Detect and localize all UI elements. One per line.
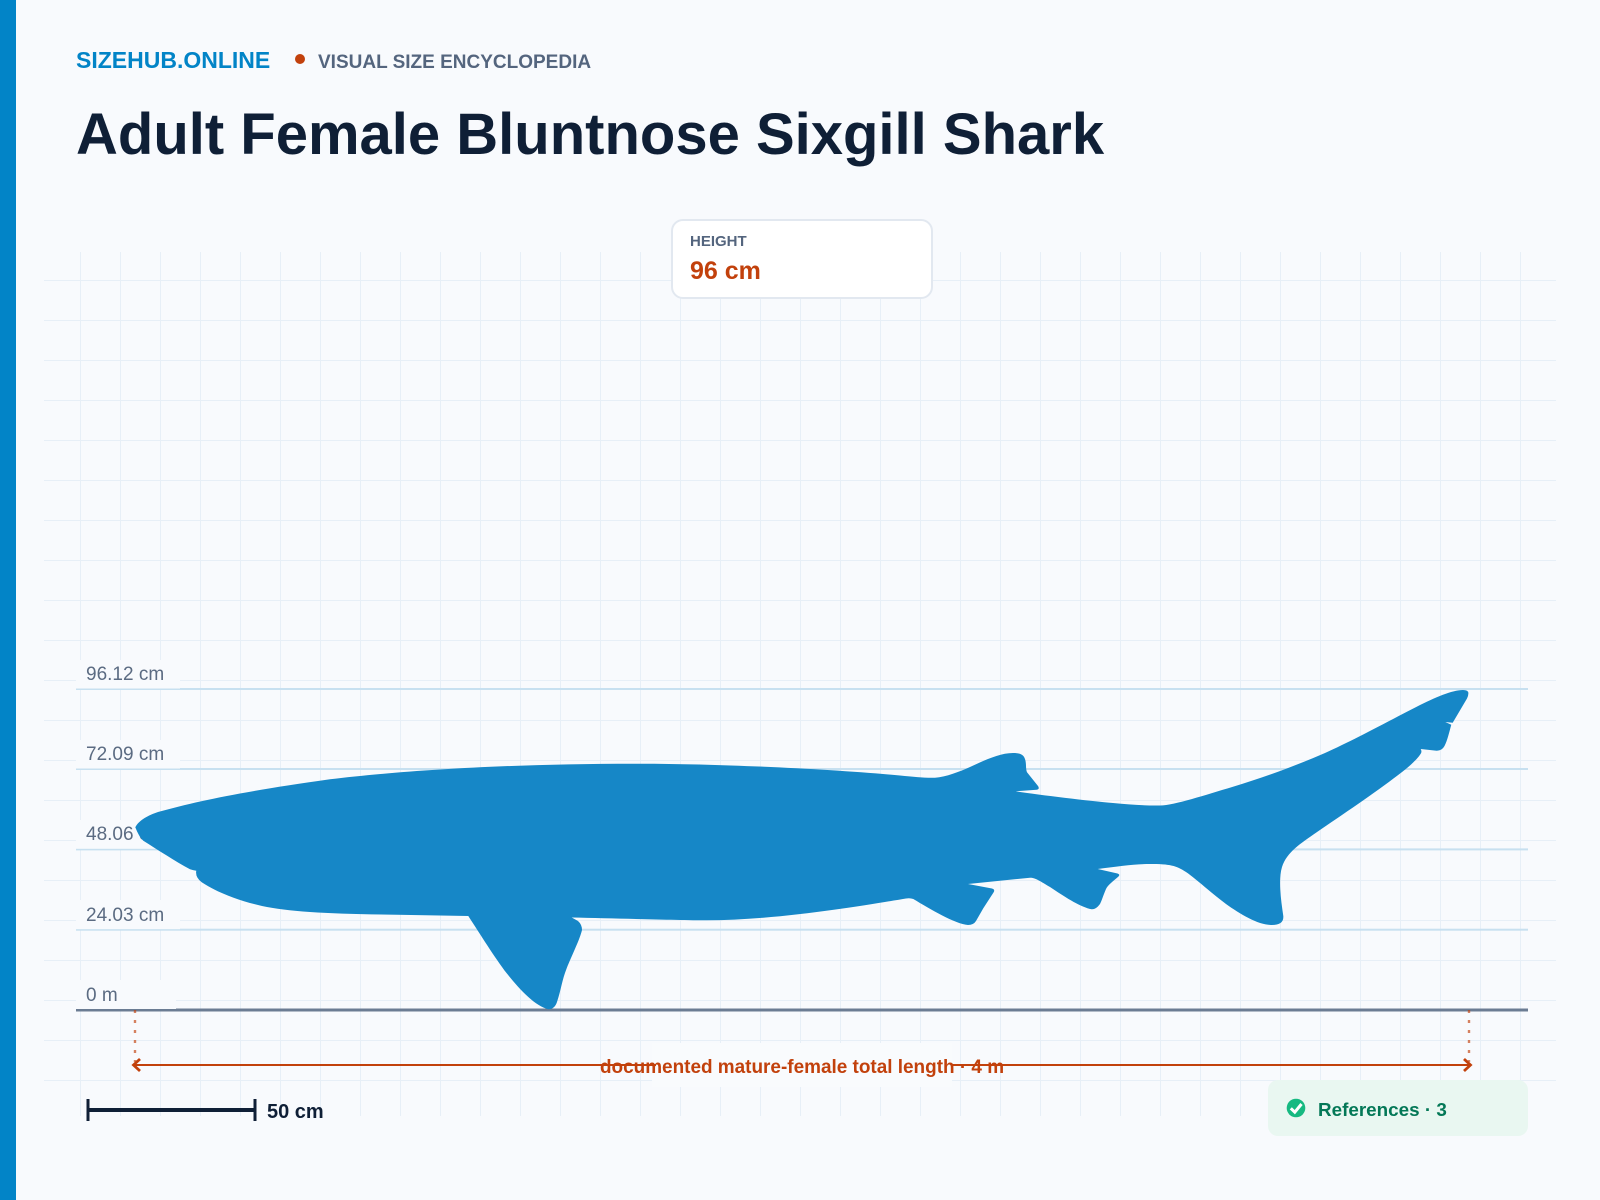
card: height: 96 cm	[690, 257, 761, 285]
title: Adult Female Bluntnose Sixgill Shark	[76, 102, 1105, 167]
axis labels: 0 m	[86, 985, 118, 1006]
length dimension: arrow	[133, 1059, 1471, 1071]
accent bar	[0, 0, 16, 1200]
card: height: HEIGHT	[690, 233, 747, 250]
brand header	[76, 47, 591, 73]
axis labels: 24.03 cm	[86, 905, 164, 926]
brand header: SIZEHUB.ONLINE	[76, 47, 270, 73]
height reference lines	[76, 688, 1528, 931]
ground line	[76, 1008, 1528, 1012]
axis labels	[76, 660, 180, 1009]
badge: references: References · 3	[1318, 1099, 1447, 1120]
card: height	[672, 220, 932, 298]
shark silhouette	[135, 690, 1468, 1009]
scale bar	[86, 1099, 324, 1123]
brand header: VISUAL SIZE ENCYCLOPEDIA	[318, 52, 591, 73]
length label: documented mature-female total length · 4 m	[600, 1057, 1004, 1078]
badge: references	[1268, 1080, 1528, 1136]
background grid	[44, 252, 1556, 1116]
axis labels: 72.09 cm	[86, 744, 164, 765]
axis labels: 96.12 cm	[86, 664, 164, 685]
length label	[600, 1043, 1004, 1087]
axis labels: 48.06 cm	[86, 824, 164, 845]
length dimension: dotted guides	[135, 1010, 1469, 1062]
scale bar: 50 cm	[267, 1101, 324, 1123]
